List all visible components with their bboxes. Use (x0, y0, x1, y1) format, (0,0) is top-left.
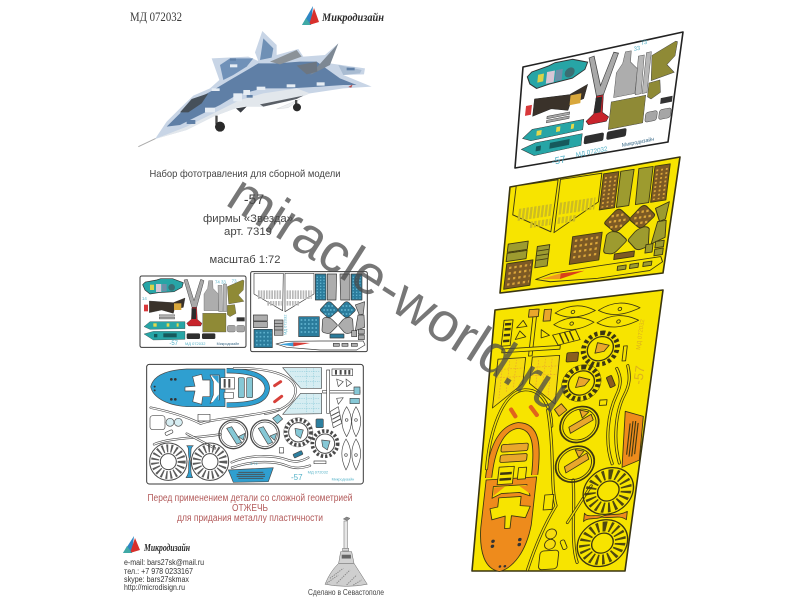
small plate A scheme (140, 276, 246, 347)
contact details: skype: bars27skmax (124, 574, 190, 584)
watermark: miracle-world.ru (218, 162, 581, 424)
brand logo: Микродизайн: Микродизайн (321, 10, 384, 24)
small plate C scheme: 1:72 (250, 461, 259, 466)
small plate A scheme: 74 33 (215, 279, 226, 284)
aircraft illustration (138, 31, 372, 147)
small plate A scheme: Микродизайн (217, 342, 239, 346)
footer logo: Микродизайн (143, 543, 190, 554)
small plate C scheme: Микродизайн (332, 477, 354, 481)
warning text: anneal the metal: Перед применением детали со сложной геометрией (148, 493, 352, 504)
photo-etched plate 1 (color) (515, 32, 683, 168)
small plate A scheme: 14 (142, 296, 147, 301)
footer logo (123, 536, 190, 554)
catalog number: МД 072032 (130, 9, 182, 24)
contact details: e-mail: bars27sk@mail.ru (124, 557, 204, 567)
contact details (124, 557, 204, 592)
kit description text: фирмы «Звезда» (203, 213, 293, 225)
photo-etched plate 1 (color): Микродизайн (621, 136, 654, 149)
small plate A scheme: МД 072032 (185, 341, 206, 346)
brand logo: Микродизайн (302, 6, 384, 25)
small plate A scheme: -57 (169, 341, 179, 347)
small plate B scheme (251, 272, 367, 352)
small plate C scheme: МД 072032 (308, 470, 329, 475)
photo-etched plate 1 (color): МД 072032 (575, 146, 608, 159)
warning text: anneal the metal: ОТЖЕЧЬ (232, 503, 268, 514)
photo-etched plate 1 (color): 33 (634, 46, 641, 53)
small plate C scheme: -57 (291, 473, 303, 482)
warning text: anneal the metal (148, 493, 352, 524)
small plate A scheme: 73 (232, 279, 237, 284)
photo-etched plate 1 (color): -57 (551, 154, 566, 168)
kit description text: арт. 7319 (224, 226, 272, 238)
kit description text (150, 168, 341, 266)
contact details: http://microdisign.ru (124, 582, 185, 592)
photo-etched plate 3 (yellow): МД 072032 (636, 318, 646, 350)
photo-etched plate 3 (yellow): -57 (630, 365, 648, 385)
contact details: тел.: +7 978 0233167 (124, 566, 193, 576)
photo-etched plate 3 (yellow) (472, 290, 663, 574)
small plate B scheme: МД 072032 (283, 314, 288, 335)
caption: made in Sevastopol: Сделано в Севастополе (308, 587, 384, 597)
monument icon: Sevastopol (325, 517, 367, 586)
kit description text: масштаб 1:72 (210, 254, 280, 266)
photo-etched plate 2 (yellow) (500, 157, 680, 293)
kit description text: -57 (244, 191, 264, 207)
small plate C scheme (147, 364, 363, 484)
photo-etched plate 1 (color): 73 (641, 40, 648, 47)
kit description text: Набор фототравления для сборной модели (150, 168, 341, 180)
warning text: anneal the metal: для придания металлу пластичности (177, 513, 323, 524)
